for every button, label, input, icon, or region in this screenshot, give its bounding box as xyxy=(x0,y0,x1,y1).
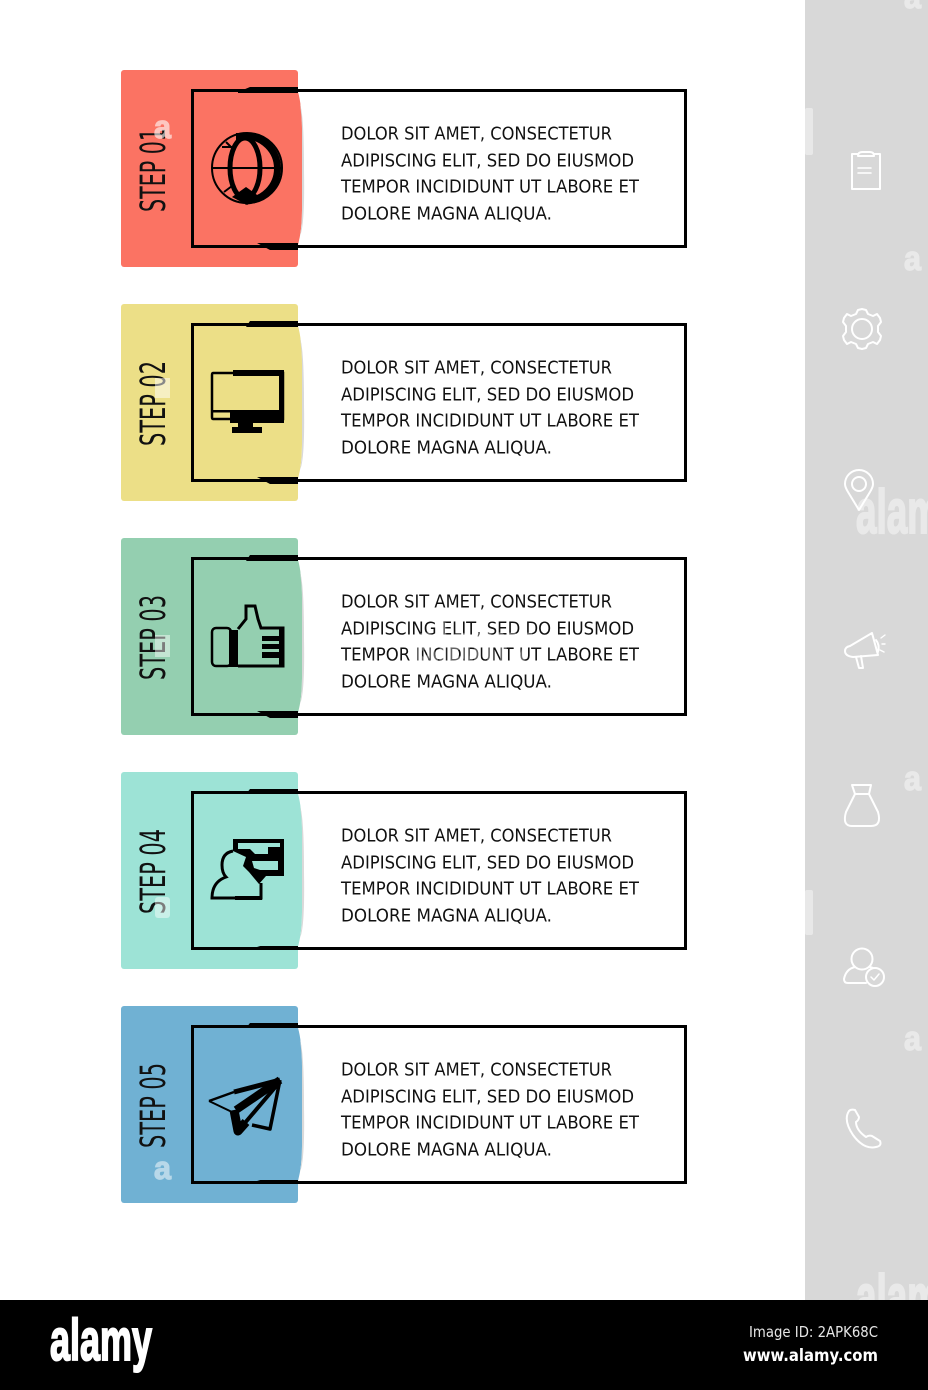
description xyxy=(340,592,640,692)
description: DOLORE MAGNA ALIQUA. xyxy=(341,204,552,224)
text box xyxy=(192,792,686,948)
panel: step 01 xyxy=(121,70,686,267)
description: TEMPOR INCIDIDUNT UT LABORE ET xyxy=(340,176,640,198)
description: ADIPISCING ELIT, SED DO EIUSMOD xyxy=(341,618,634,640)
frame ends xyxy=(238,87,298,250)
description: ADIPISCING ELIT, SED DO EIUSMOD xyxy=(341,852,634,874)
description xyxy=(340,1060,640,1160)
icon: paper plane xyxy=(209,1080,280,1131)
sidebar panel: a xyxy=(904,760,922,798)
watermark: a xyxy=(154,109,171,145)
description: TEMPOR INCIDIDUNT UT LABORE ET xyxy=(340,644,640,666)
panel: step 04 xyxy=(121,772,686,969)
watermark: a xyxy=(154,1150,171,1186)
watermark xyxy=(155,378,170,398)
sidebar panel: a xyxy=(904,1020,922,1058)
footer logo: alamy xyxy=(50,1308,152,1373)
icon: person with chat xyxy=(212,839,284,900)
text box xyxy=(192,558,686,714)
panel: step 05 xyxy=(121,1006,686,1203)
label: STEP 02 xyxy=(134,361,174,446)
description: ADIPISCING ELIT, SED DO EIUSMOD xyxy=(341,150,634,172)
frame ends xyxy=(246,789,298,950)
colour tab xyxy=(121,304,298,501)
box inner colour xyxy=(194,1028,302,1181)
description: DOLORE MAGNA ALIQUA. xyxy=(341,906,552,926)
frame ends xyxy=(246,1023,298,1184)
panel: step 03 xyxy=(121,538,686,735)
text box xyxy=(192,324,686,480)
icon: user check xyxy=(844,948,884,986)
label: STEP 04 xyxy=(134,829,174,914)
colour tab xyxy=(121,538,298,735)
icon: money bag xyxy=(845,785,879,826)
watermark xyxy=(155,635,170,657)
icon: globe xyxy=(212,133,282,205)
icon: gear xyxy=(843,309,881,349)
watermark over text: alamy xyxy=(414,614,532,674)
colour tab xyxy=(121,70,298,267)
label: STEP 05 xyxy=(134,1063,174,1148)
description: DOLOR SIT AMET, CONSECTETUR xyxy=(341,592,612,612)
text box xyxy=(192,90,686,246)
description: DOLOR SIT AMET, CONSECTETUR xyxy=(341,826,612,846)
image id: Image ID: 2APK68C xyxy=(749,1323,878,1341)
description: ADIPISCING ELIT, SED DO EIUSMOD xyxy=(341,1086,634,1108)
description: DOLOR SIT AMET, CONSECTETUR xyxy=(341,1060,612,1080)
description: TEMPOR INCIDIDUNT UT LABORE ET xyxy=(340,878,640,900)
icon: phone xyxy=(847,1110,880,1148)
description: DOLORE MAGNA ALIQUA. xyxy=(341,672,552,692)
box inner colour xyxy=(194,560,302,713)
description: DOLORE MAGNA ALIQUA. xyxy=(341,1140,552,1160)
description: DOLOR SIT AMET, CONSECTETUR xyxy=(341,124,612,144)
icon: monitor xyxy=(212,370,284,433)
colour tab xyxy=(121,772,298,969)
sidebar panel xyxy=(805,0,928,1332)
box inner colour xyxy=(194,794,302,947)
box inner colour xyxy=(194,326,302,479)
description: TEMPOR INCIDIDUNT UT LABORE ET xyxy=(340,410,640,432)
label: STEP 03 xyxy=(134,595,174,680)
text box xyxy=(192,1026,686,1182)
panel: step 02 xyxy=(121,304,686,501)
description xyxy=(340,124,640,224)
icon: location pin xyxy=(845,470,873,510)
description xyxy=(340,358,640,458)
watermark xyxy=(155,897,170,918)
sidebar panel: a xyxy=(904,240,922,278)
description: DOLOR SIT AMET, CONSECTETUR xyxy=(341,358,612,378)
description: DOLORE MAGNA ALIQUA. xyxy=(341,438,552,458)
frame ends xyxy=(246,555,298,718)
description: ADIPISCING ELIT, SED DO EIUSMOD xyxy=(341,384,634,406)
icon: megaphone xyxy=(845,633,885,668)
colour tab xyxy=(121,1006,298,1203)
box inner colour xyxy=(194,92,302,245)
label: STEP 01 xyxy=(134,128,174,212)
description xyxy=(340,826,640,926)
icon: clipboard xyxy=(852,152,880,189)
website: www.alamy.com xyxy=(743,1346,878,1366)
footer bar xyxy=(0,1300,928,1390)
frame ends xyxy=(246,321,298,484)
icon: thumbs up xyxy=(212,606,284,667)
description: TEMPOR INCIDIDUNT UT LABORE ET xyxy=(340,1112,640,1134)
